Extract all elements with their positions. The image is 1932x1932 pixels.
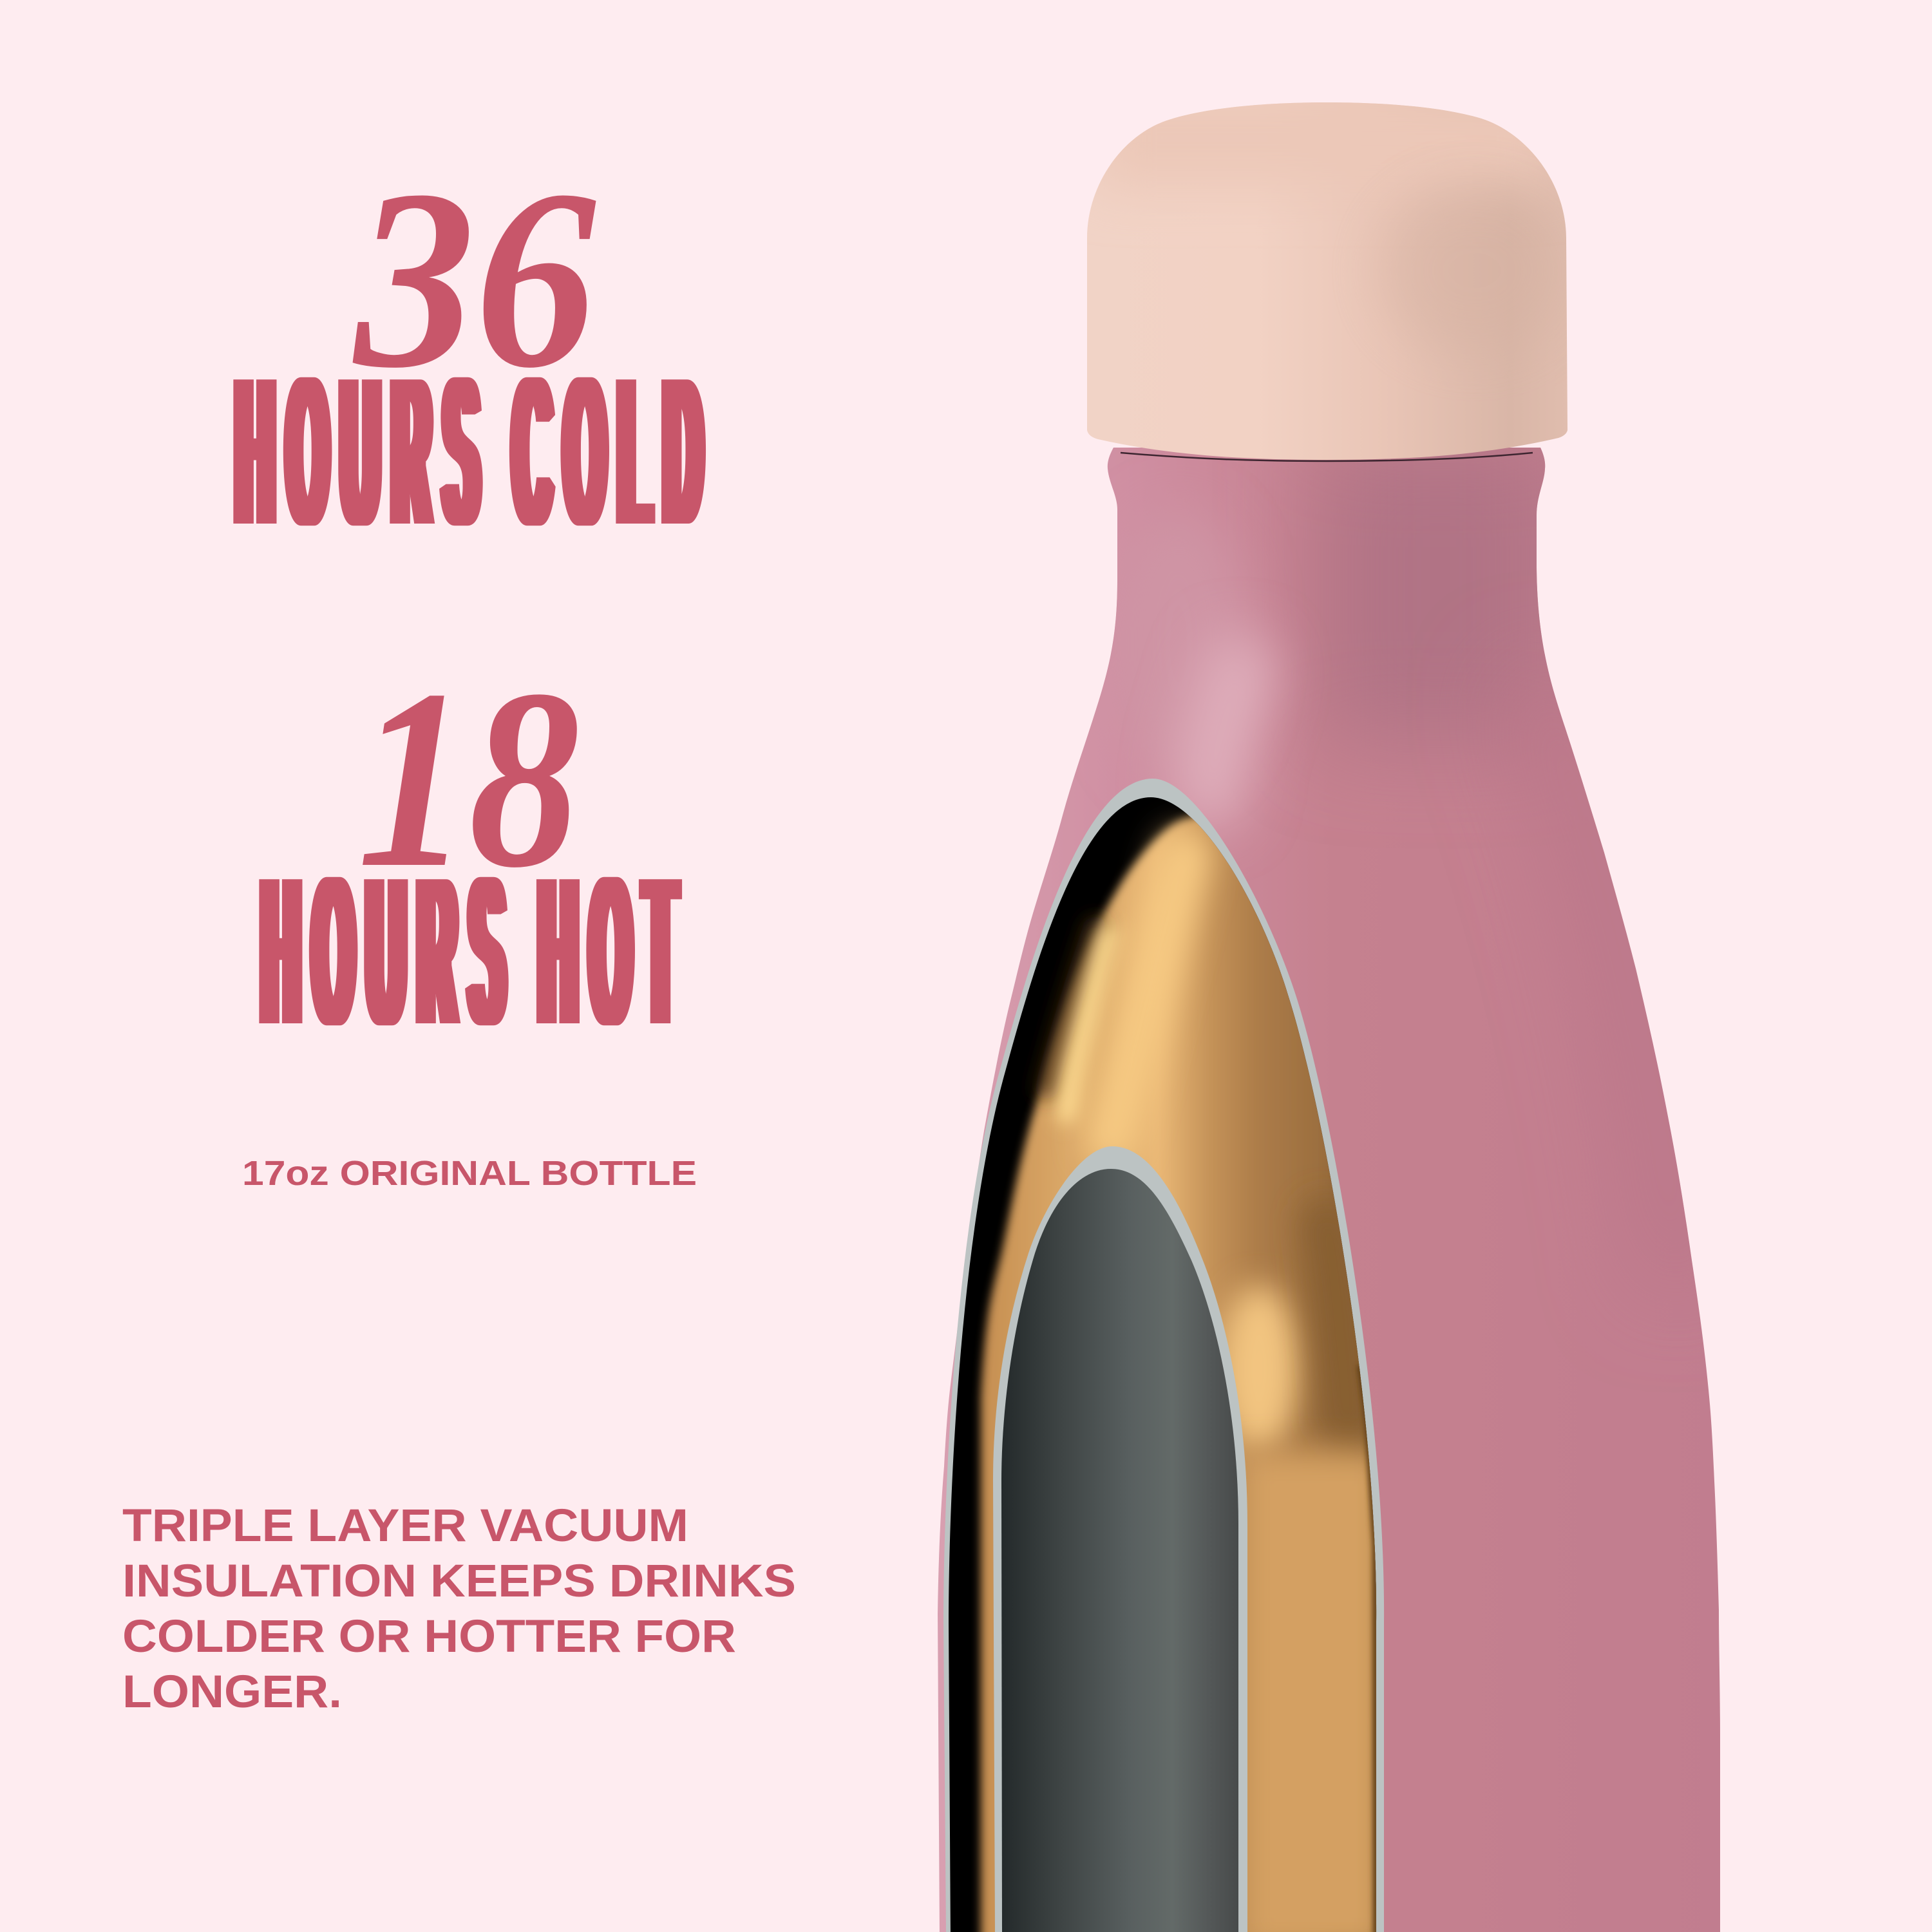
copper highlight streak — [1066, 934, 1109, 1114]
label: bottle size: 17oz ORIGINAL BOTTLE — [242, 1154, 697, 1193]
stat: 36 hours cold — [236, 137, 715, 572]
bottle illustration — [927, 90, 1732, 1932]
cutaway: outer steel wall — [943, 779, 1384, 1932]
big number 36: 36 — [351, 137, 596, 421]
text block: insulation description: LONGER. — [122, 1667, 342, 1718]
dark edge of copper — [1046, 927, 1095, 1088]
heading: hours cold: HOURS COLD — [236, 332, 715, 572]
stat: 18 hours hot — [262, 637, 690, 1072]
cutaway: inner liner — [1001, 1169, 1238, 1932]
copper shading — [1111, 857, 1185, 1140]
cap — [1082, 90, 1571, 464]
neck seam under cap — [1121, 453, 1533, 461]
heading: hours hot: HOURS HOT — [262, 831, 690, 1072]
bottle body — [927, 438, 1732, 1932]
cutaway: inner steel wall — [993, 1146, 1247, 1932]
text block: insulation description: TRIPLE LAYER VACUUM — [122, 1501, 688, 1551]
text block: insulation description: COLDER OR HOTTER FOR — [122, 1611, 736, 1662]
cutaway: vacuum gap and copper layer — [949, 797, 1377, 1932]
big number 18: 18 — [357, 637, 580, 921]
text block: insulation description — [122, 1501, 796, 1718]
text block: insulation description: INSULATION KEEPS DRINKS — [122, 1556, 796, 1607]
copper layer — [981, 799, 1417, 1932]
